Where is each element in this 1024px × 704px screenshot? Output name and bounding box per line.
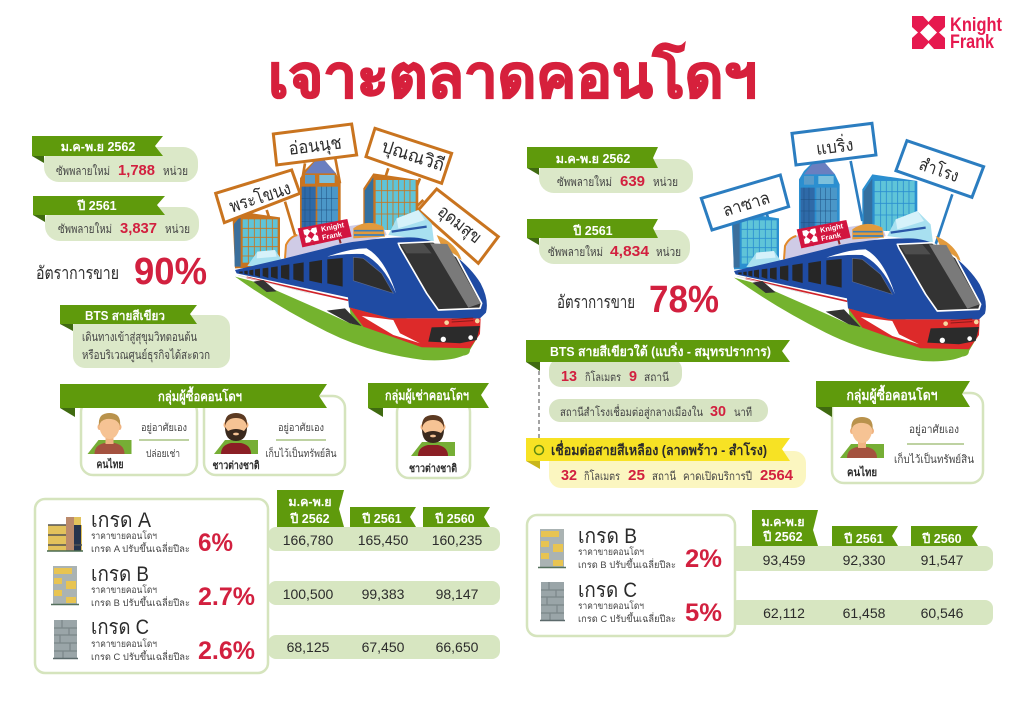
panel: left buyer group: อยู่อาศัยเอง: [278, 422, 324, 434]
column headers: ปี 2562: [289, 512, 330, 526]
panel: yellow line connection: กิโลเมตร: [584, 469, 620, 483]
panel: left supply 2561: ซัพพลายใหม่: [58, 222, 112, 236]
right sales rate: [557, 279, 719, 321]
values: 100,500: [283, 586, 334, 602]
right sales rate: อัตราการขาย: [557, 292, 635, 312]
values: [763, 552, 964, 621]
grade B: 2.7%: [198, 583, 255, 611]
panel: BTS southern green line: [526, 340, 790, 438]
panel: BTS southern green line: นาที: [734, 406, 752, 419]
grade C: ราคาขายคอนโดฯ: [578, 600, 644, 612]
grade C: ราคาขายคอนโดฯ: [91, 638, 157, 650]
grade A: 6%: [198, 529, 233, 557]
panel: yellow line connection: สถานี: [652, 470, 676, 483]
grade C: เกรด C ปรับขึ้นเฉลี่ยปีละ: [578, 612, 676, 625]
panel: right buyer group: [816, 381, 983, 483]
panel: yellow line connection: 2564: [760, 467, 794, 484]
panel: left buyer group: เก็บไว้เป็นทรัพย์สิน: [266, 446, 336, 460]
illustration: left train with signs: พระโขนง: [226, 177, 293, 217]
panel: left renter group: กลุ่มผู้เช่าคอนโดฯ: [385, 386, 469, 404]
grade C: เกรด C ปรับขึ้นเฉลี่ยปีละ: [91, 650, 190, 663]
panel: left supply 2562: ซัพพลายใหม่: [56, 164, 110, 178]
panel: BTS southern green line: สถานี: [644, 371, 669, 384]
panel: left renter group: ชาวต่างชาติ: [409, 462, 457, 475]
grade B: 2%: [685, 545, 722, 573]
right sales rate: 78%: [649, 279, 719, 321]
grade A: เกรด A: [91, 509, 151, 532]
panel: BTS southern green line: 30: [710, 403, 726, 420]
panel: left supply 2562: [32, 136, 198, 182]
column headers: ปี 2560: [434, 512, 475, 526]
grade C: เกรด C: [91, 616, 149, 639]
illustration: left train with signs: [216, 124, 498, 360]
panel: left supply 2561: หน่วย: [165, 222, 190, 236]
grade B: เกรด B ปรับขึ้นเฉลี่ยปีละ: [91, 596, 190, 609]
panel: left buyer group: กลุ่มผู้ซื้อคอนโดฯ: [158, 386, 242, 405]
column headers: [752, 510, 978, 546]
grade B: เกรด B ปรับขึ้นเฉลี่ยปีละ: [578, 558, 676, 571]
left sales rate: [36, 251, 207, 293]
panel: left supply 2562: หน่วย: [163, 164, 188, 178]
panel: left buyer group: [60, 384, 345, 475]
grade B: [538, 525, 722, 573]
panel: yellow line connection: 25: [628, 467, 645, 484]
panel: BTS southern green line: 9: [629, 368, 637, 385]
column headers: ปี 2562: [762, 530, 803, 544]
grade C: [540, 579, 722, 627]
panel: right buyer group: อยู่อาศัยเอง: [909, 424, 959, 436]
panel: left supply 2561: 3,837: [120, 220, 157, 237]
illustration: right train with signs: [701, 123, 986, 361]
panel: right buyer group: เก็บไว้เป็นทรัพย์สิน: [894, 452, 974, 466]
values: 93,459: [763, 552, 806, 568]
values: 67,450: [362, 639, 405, 655]
panel: right supply 2562: ซัพพลายใหม่: [557, 175, 612, 189]
values: [283, 532, 483, 655]
panel: right grade table: [527, 510, 993, 636]
values: 98,147: [436, 586, 479, 602]
column headers: ปี 2560: [921, 532, 962, 546]
panel: BTS green line: BTS สายสีเขียว: [85, 309, 165, 323]
panel: left renter group: [368, 383, 489, 478]
grade A: [47, 509, 233, 557]
illustration: left train with signs: ปุณณวิถี: [379, 136, 447, 176]
panel: yellow line connection: คาดเปิดบริการปี: [683, 470, 752, 483]
panel: BTS southern green line: BTS สายสีเขียวใต้ (แบริ่ง - สมุทรปราการ): [550, 342, 771, 360]
values: 62,112: [763, 605, 805, 621]
panel: left supply 2561: [33, 196, 199, 241]
grade B: เกรด B: [91, 563, 149, 586]
sign posts: [766, 158, 952, 244]
values: 66,650: [436, 639, 479, 655]
values: 166,780: [283, 532, 334, 548]
grade A: ราคาขายคอนโดฯ: [91, 530, 157, 542]
panel: right supply 2561: 4,834: [610, 243, 650, 260]
panel: yellow line connection: [526, 438, 806, 488]
panel: yellow line connection: 32: [561, 467, 577, 484]
panel: right supply 2562: หน่วย: [653, 175, 678, 189]
panel: right supply 2561: หน่วย: [656, 245, 681, 259]
grade C: 5%: [685, 599, 722, 627]
grade C: 2.6%: [198, 637, 255, 665]
column headers: [277, 490, 490, 527]
panel: BTS green line: [60, 305, 230, 368]
panel: BTS southern green line: สถานีสำโรงเชื่อมต่อสู่กลางเมืองใน: [560, 404, 703, 419]
values: 60,546: [921, 605, 964, 621]
illustration: right train with signs: สำโรง: [917, 154, 962, 186]
panel: left supply 2561: ปี 2561: [76, 199, 117, 213]
panel: BTS green line: เดินทางเข้าสู่สุขุมวิทตอนต้น: [82, 330, 197, 345]
column headers: ปี 2561: [361, 512, 402, 526]
column headers: ม.ค-พ.ย: [761, 515, 805, 529]
title: เจาะตลาดคอนโดฯ: [268, 42, 757, 110]
logo: Knight Frank: [912, 15, 1003, 53]
panel: BTS southern green line: กิโลเมตร: [585, 370, 621, 384]
logo: Knight Frank: Knight: [950, 15, 1003, 36]
panel: left supply 2562: 1,788: [118, 162, 155, 179]
left sales rate: 90%: [134, 251, 207, 293]
grade B: [51, 563, 255, 611]
illustration: left train with signs: อ่อนนุช: [287, 132, 343, 160]
panel: BTS green line: หรือบริเวณศูนย์ธุรกิจได้สะดวก: [82, 348, 210, 363]
values: 91,547: [921, 552, 964, 568]
panel: left buyer group: อยู่อาศัยเอง: [141, 422, 187, 434]
panel: right supply 2561: ซัพพลายใหม่: [548, 245, 603, 259]
panel: right supply 2562: 639: [620, 173, 645, 190]
grade A: เกรด A ปรับขึ้นเฉลี่ยปีละ: [91, 542, 190, 555]
panel: right supply 2562: ม.ค-พ.ย 2562: [556, 152, 630, 166]
grade C: [53, 616, 255, 665]
values: 92,330: [843, 552, 886, 568]
panel: left buyer group: คนไทย: [96, 457, 124, 471]
column headers: ม.ค-พ.ย: [288, 495, 332, 509]
values: 165,450: [358, 532, 409, 548]
grade B: ราคาขายคอนโดฯ: [578, 546, 644, 558]
logo: Knight Frank: Frank: [950, 32, 994, 53]
illustration: left train with signs: อุดมสุข: [434, 201, 486, 248]
panel: right supply 2562: [527, 147, 693, 193]
panel: right supply 2561: [527, 219, 690, 264]
illustration: right train with signs: ลาซาล: [720, 187, 772, 221]
panel: yellow line connection: เชื่อมต่อสายสีเหลือง (ลาดพร้าว - สำโรง): [551, 440, 767, 458]
grade C: เกรด C: [578, 579, 637, 602]
sign posts: [267, 157, 423, 235]
values: 99,383: [362, 586, 405, 602]
values: 68,125: [287, 639, 330, 655]
panel: right supply 2561: ปี 2561: [572, 224, 613, 238]
grade B: เกรด B: [578, 525, 637, 548]
panel: left grade table: [35, 490, 500, 673]
panel: left buyer group: ชาวต่างชาติ: [212, 459, 260, 472]
panel: right buyer group: คนไทย: [847, 465, 877, 479]
panel: left buyer group: ปล่อยเช่า: [146, 448, 180, 460]
grade B: ราคาขายคอนโดฯ: [91, 584, 157, 596]
left sales rate: อัตราการขาย: [36, 263, 119, 283]
column headers: ปี 2561: [843, 532, 884, 546]
illustration: right train with signs: แบริ่ง: [815, 132, 854, 159]
panel: left supply 2562: ม.ค-พ.ย 2562: [61, 140, 135, 154]
panel: right buyer group: กลุ่มผู้ซื้อคอนโดฯ: [846, 384, 938, 404]
panel: BTS southern green line: 13: [561, 368, 577, 385]
values: 160,235: [432, 532, 483, 548]
values: 61,458: [843, 605, 886, 621]
